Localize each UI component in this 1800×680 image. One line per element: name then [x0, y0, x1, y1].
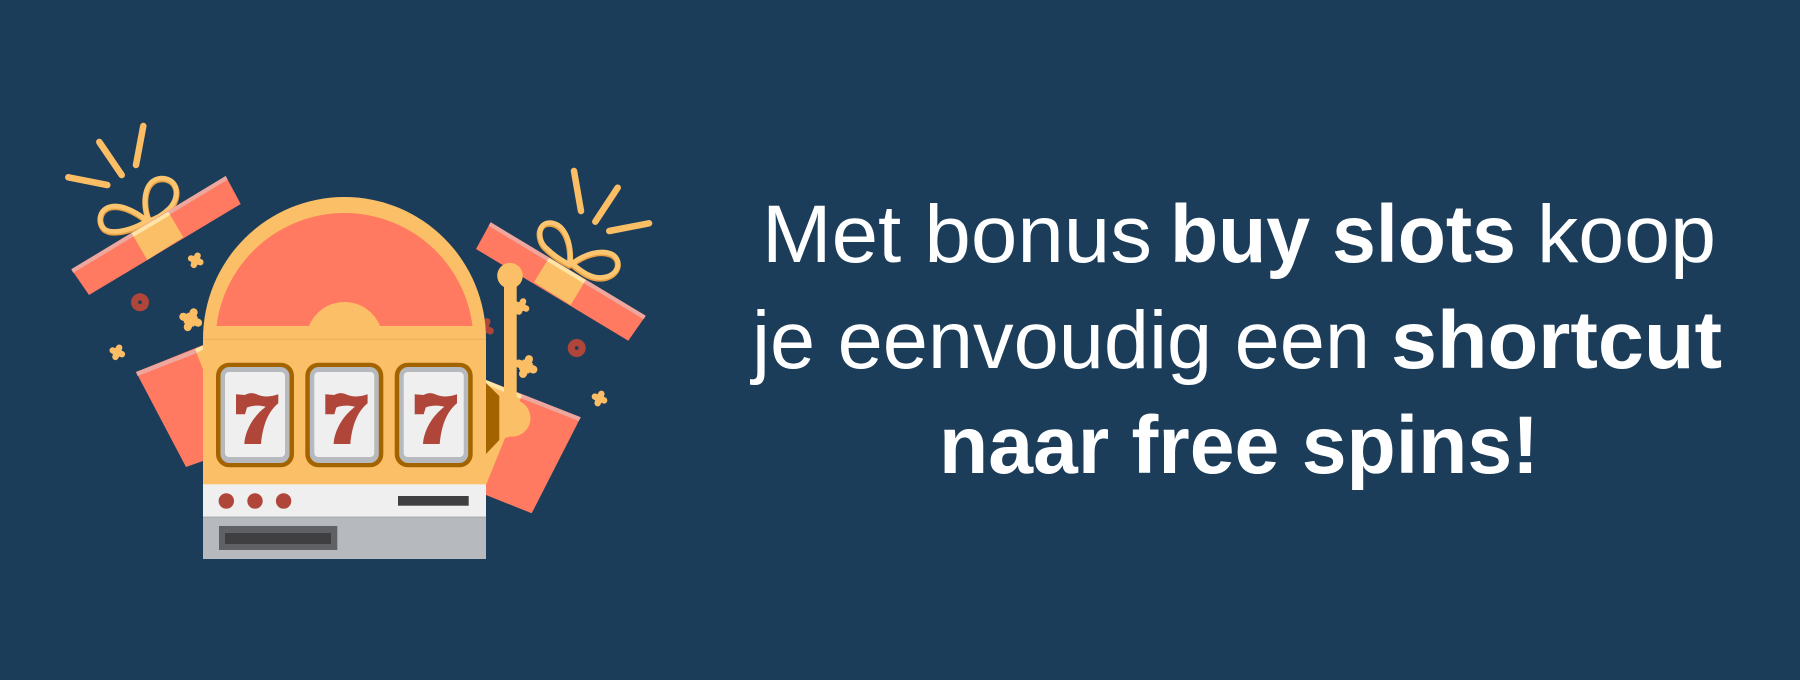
reel 3	[395, 363, 473, 467]
line 2: je eenvoudig een	[750, 295, 1370, 386]
confetti: red ring left	[131, 293, 149, 311]
line 3: naar free spins!	[939, 400, 1539, 491]
confetti: yellow stars	[111, 254, 606, 405]
gift lid: top right	[476, 222, 646, 341]
gift lid: top left	[71, 176, 241, 295]
icon: right gift bow	[540, 223, 618, 279]
line 1: koop	[1537, 189, 1716, 280]
lever	[497, 263, 530, 438]
icon: left gift bow	[100, 178, 177, 233]
line 1: buy slots	[1170, 189, 1516, 280]
rays: top-left gift	[68, 126, 143, 185]
illustration: slot machine with gifts	[68, 126, 649, 559]
reel 1	[216, 363, 294, 467]
line 2: shortcut	[1391, 295, 1722, 386]
slot machine	[203, 197, 530, 559]
machine body	[203, 339, 486, 485]
reel 2	[305, 363, 383, 467]
line 1: Met bonus	[762, 189, 1152, 280]
machine arch	[203, 197, 486, 340]
side panel	[486, 383, 499, 454]
confetti: red ring right	[568, 339, 586, 357]
confetti: red star behind machine	[475, 319, 493, 337]
line 1	[762, 189, 1716, 280]
control panel	[203, 484, 486, 517]
gift box: right	[486, 380, 581, 513]
line 2	[750, 295, 1722, 386]
rays: top-right gift	[574, 171, 649, 231]
gift box: left	[136, 345, 204, 467]
machine base	[203, 517, 486, 559]
arch panel	[216, 213, 472, 326]
headline	[750, 189, 1722, 491]
